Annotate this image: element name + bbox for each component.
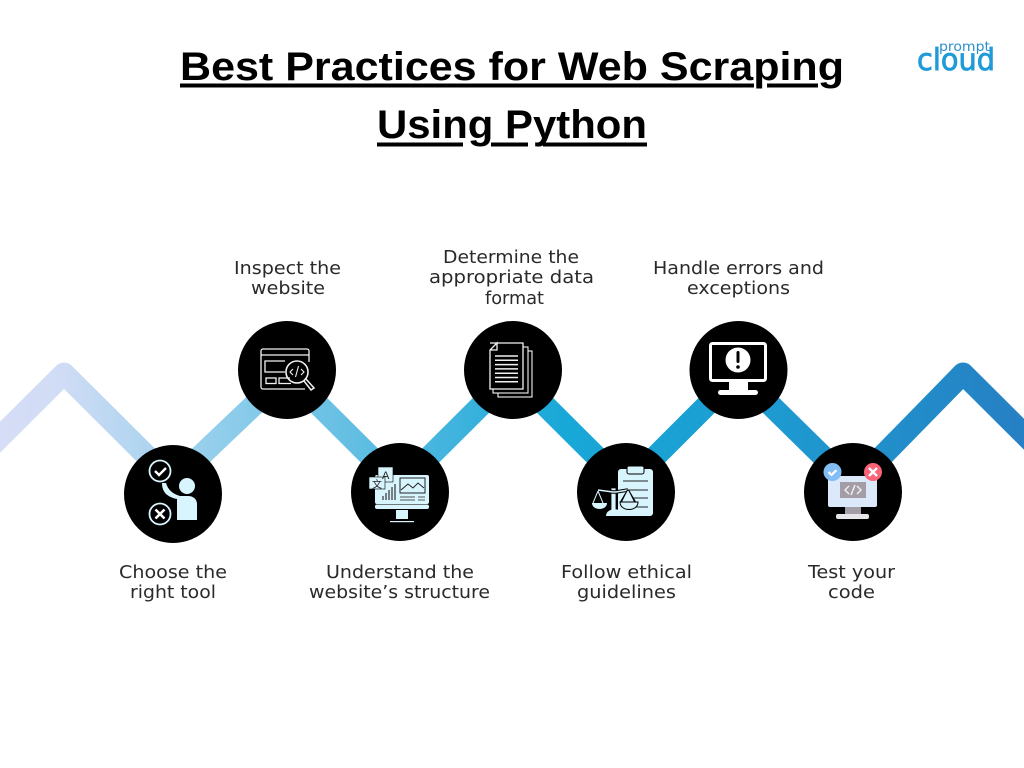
label: handle errors and exceptions: Handle errors and	[653, 258, 824, 279]
step 2: inspect the website	[238, 321, 336, 419]
label: choose the right tool	[119, 562, 227, 603]
label: follow ethical guidelines: guidelines	[577, 582, 676, 603]
label: determine the appropriate data format	[429, 247, 594, 309]
step 6: handle errors and exceptions	[690, 321, 788, 419]
step 5: follow ethical guidelines	[577, 443, 675, 541]
zigzag line	[0, 374, 1024, 486]
label: determine the appropriate data format: Determine the	[443, 247, 579, 268]
logo: promptcloud: prompt	[939, 40, 990, 55]
icon: stacked documents	[490, 343, 532, 397]
logo: promptcloud: cloud	[917, 43, 995, 78]
label: test your code: code	[828, 582, 875, 603]
label: inspect the website	[234, 258, 341, 299]
icon: monitor with code and status badges	[824, 463, 882, 519]
label: inspect the website: Inspect the	[234, 258, 341, 279]
step 4: determine the appropriate data format	[464, 321, 562, 419]
label: understand the website's structure: Understand the	[326, 562, 474, 583]
step 1: choose the right tool	[124, 445, 222, 543]
label: test your code	[807, 562, 896, 603]
title: Using Python	[377, 103, 647, 147]
label: choose the right tool: Choose the	[119, 562, 227, 583]
label: handle errors and exceptions: exceptions	[687, 278, 790, 299]
label: follow ethical guidelines	[561, 562, 692, 603]
label: determine the appropriate data format: format	[485, 288, 544, 309]
icon: browser with magnifier	[261, 349, 314, 390]
icon: monitor with translation: A	[382, 470, 390, 482]
label: test your code: Test your	[807, 562, 896, 583]
icon: monitor with translation	[369, 467, 429, 522]
label: understand the website's structure	[309, 562, 490, 603]
title: Best Practices for Web Scraping	[180, 45, 844, 89]
step 3: understand the website's structure	[351, 443, 449, 541]
title	[180, 45, 844, 147]
label: inspect the website: website	[251, 278, 325, 299]
label: understand the website's structure: website’s structure	[309, 582, 490, 603]
label: determine the appropriate data format: appropriate data	[429, 267, 594, 288]
label: follow ethical guidelines: Follow ethical	[561, 562, 692, 583]
icon: person choosing	[150, 460, 197, 524]
icon: monitor with translation: 文	[372, 478, 382, 491]
label: handle errors and exceptions	[653, 258, 824, 299]
step 7: test your code	[804, 443, 902, 541]
label: choose the right tool: right tool	[130, 582, 216, 603]
icon: scales and clipboard	[592, 466, 653, 516]
icon: monitor with alert	[710, 344, 766, 395]
